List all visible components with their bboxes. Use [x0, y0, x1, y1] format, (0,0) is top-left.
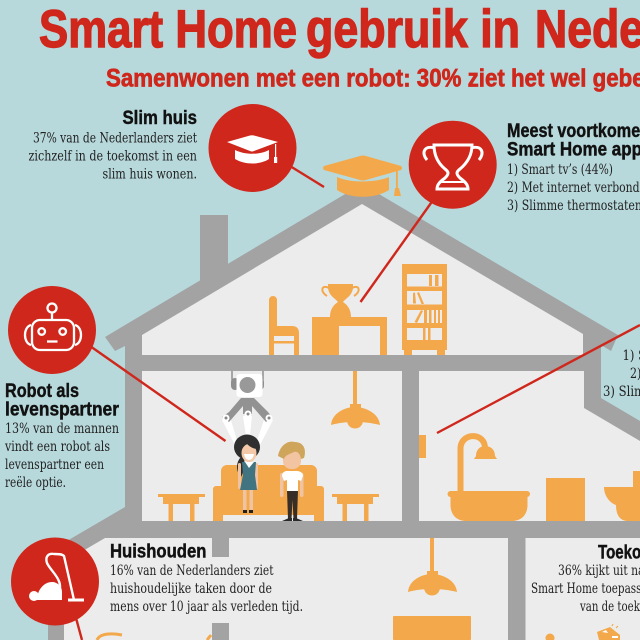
- bathroom: [419, 371, 640, 521]
- partial figure and object bottom right: [546, 624, 620, 640]
- table ground floor: [393, 616, 471, 640]
- title: Smart Home: [39, 0, 297, 59]
- text block: Robot als levenspartner: levenspartner een: [5, 457, 104, 473]
- man: [278, 442, 305, 521]
- sofa: [213, 465, 324, 521]
- text block: Slim huis: Slim huis: [122, 108, 197, 129]
- ceiling lamp ground floor: [408, 538, 457, 596]
- woman: [234, 434, 260, 513]
- icon: vacuum cleaner: [11, 538, 99, 626]
- bathtub with shower: [448, 433, 530, 521]
- text block: Robot als levenspartner: 13% van de mannen: [5, 421, 119, 437]
- text block: bathroom ranking: [603, 348, 640, 400]
- ground floor right room: [526, 538, 640, 640]
- partial furniture bottom left: [97, 634, 211, 640]
- text block: Huishouden: [110, 542, 303, 615]
- cabinet: [546, 478, 585, 521]
- house walls and roof: [48, 184, 640, 640]
- house cross-section: [48, 184, 640, 640]
- side table right: [332, 494, 379, 521]
- attic room: [142, 204, 583, 355]
- text block: Robot als levenspartner: [4, 381, 120, 491]
- text block: Huishouden: Huishouden: [110, 542, 206, 562]
- title: gebruik in: [306, 0, 520, 59]
- text block: Slim huis: zichzelf in de toekomst in een: [28, 148, 197, 164]
- text block: Robot als levenspartner: reële optie.: [5, 475, 66, 491]
- text block: Robot als levenspartner: Robot als: [5, 381, 79, 402]
- icon: graduation cap: [208, 104, 296, 192]
- text block: Robot als levenspartner: vindt een robot als: [4, 439, 110, 455]
- icon: trophy: [409, 121, 497, 209]
- text block: Huishouden: mens over 10 jaar als verleden tijd.: [110, 599, 303, 615]
- chair: [269, 296, 299, 355]
- connector lines: [76, 166, 640, 640]
- wall socket: [419, 435, 426, 458]
- chimney: [200, 215, 228, 285]
- graduation cap on roof: [323, 156, 402, 197]
- text block: Slim huis: 37% van de Nederlanders ziet: [33, 130, 197, 146]
- ceiling lamp living room: [331, 371, 380, 428]
- robot arm: [222, 371, 273, 445]
- text block: Slim huis: [28, 108, 197, 182]
- living room: [142, 371, 402, 521]
- text block: Slim huis: slim huis wonen.: [102, 166, 197, 182]
- desk with trophy: [312, 284, 387, 355]
- icon: robot: [8, 286, 96, 374]
- text block: Toekomst: [531, 542, 640, 615]
- text block: Meest voorkomende apparaten: [507, 121, 640, 214]
- text block: Huishouden: 16% van de Nederlanders ziet: [110, 563, 274, 579]
- wall stubs: [212, 538, 229, 640]
- toilet: [604, 471, 640, 521]
- text block: Meest voorkomende apparaten: 1) Smart tv’s (44%): [507, 162, 613, 178]
- text block: Robot als levenspartner: levenspartner: [5, 400, 120, 420]
- side table left: [158, 494, 205, 521]
- text block: Huishouden: huishoudelijke taken door de: [110, 581, 272, 597]
- ground floor left room: [64, 538, 508, 640]
- bookcase: [402, 264, 447, 355]
